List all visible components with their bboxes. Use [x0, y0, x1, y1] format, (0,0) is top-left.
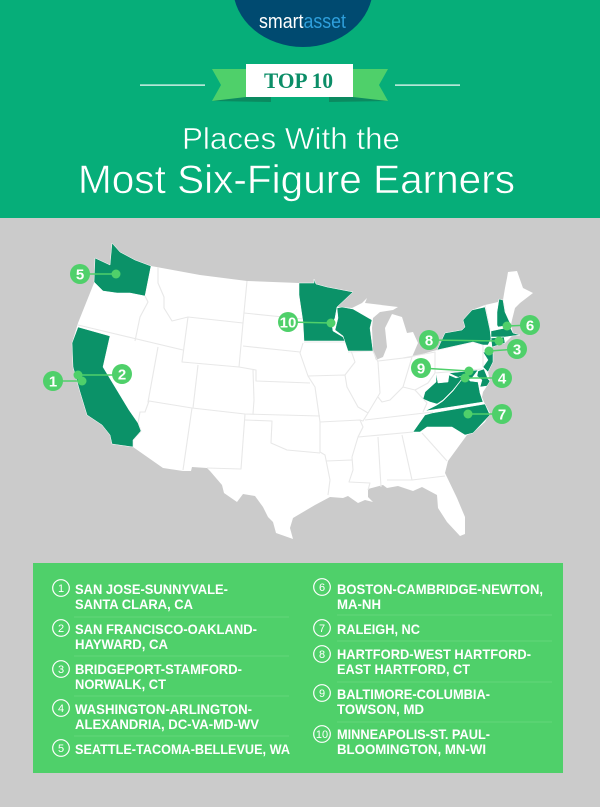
- state: West Virginia: [423, 373, 465, 404]
- marker 8: 8: [425, 332, 433, 350]
- marker 9: 9: [417, 360, 425, 378]
- item 9: BALTIMORE-COLUMBIA-: [337, 686, 490, 702]
- state borders: [78, 267, 505, 495]
- marker 7: [464, 404, 512, 424]
- marker 3: 3: [513, 342, 521, 358]
- item 7: RALEIGH, NC: [337, 621, 420, 637]
- marker 2: [74, 364, 132, 384]
- highlighted states: [72, 243, 520, 447]
- state: New York: [437, 307, 491, 350]
- state: California: [72, 327, 141, 447]
- item 10: [314, 726, 490, 757]
- state: Maryland: [449, 370, 478, 380]
- item 4: [53, 700, 260, 732]
- item 3: 3: [58, 664, 64, 676]
- map of the United States: [43, 243, 540, 539]
- state: New Jersey: [483, 352, 493, 372]
- item 2: [53, 620, 257, 652]
- item 1: SAN JOSE-SUNNYVALE-: [75, 581, 228, 597]
- item 4: 4: [58, 703, 64, 715]
- marker 10: [278, 312, 336, 332]
- marker 1: 1: [49, 374, 57, 390]
- marker 5: [70, 264, 120, 284]
- item 9: 9: [319, 688, 325, 700]
- state: Connecticut: [491, 337, 505, 347]
- marker 1: [43, 371, 86, 391]
- states silhouette: [72, 243, 533, 539]
- state: New Hampshire: [497, 299, 511, 327]
- item 8: 8: [319, 649, 325, 661]
- marker 4: 4: [498, 370, 507, 388]
- item 2: HAYWARD, CA: [75, 636, 168, 652]
- item 2: SAN FRANCISCO-OAKLAND-: [75, 621, 257, 637]
- marker 9: [411, 358, 474, 378]
- item 3: NORWALK, CT: [75, 676, 166, 692]
- item 1: SANTA CLARA, CA: [75, 596, 193, 612]
- title: Places With the: [182, 121, 400, 156]
- item 9: [314, 685, 490, 717]
- marker 5: 5: [76, 266, 84, 284]
- item 5: SEATTLE-TACOMA-BELLEVUE, WA: [75, 741, 290, 757]
- item 6: 6: [319, 582, 325, 594]
- item 3: [53, 661, 242, 692]
- item 8: HARTFORD-WEST HARTFORD-: [337, 646, 531, 662]
- item 3: BRIDGEPORT-STAMFORD-: [75, 661, 242, 677]
- marker 3: [484, 339, 527, 359]
- title: Most Six-Figure Earners: [78, 158, 515, 202]
- item 9: TOWSON, MD: [337, 701, 424, 717]
- item 10: BLOOMINGTON, MN-WI: [337, 741, 486, 757]
- item 7: [314, 620, 420, 637]
- state: Washington: [94, 243, 151, 296]
- marker 8: [419, 330, 504, 350]
- item 10: 10: [316, 729, 328, 741]
- item 4: ALEXANDRIA, DC-VA-MD-WV: [75, 716, 260, 732]
- marker 2: 2: [118, 366, 126, 384]
- ribbon: top 10: TOP 10: [264, 68, 333, 93]
- logo: smartasset: [233, 0, 373, 47]
- item 8: EAST HARTFORD, CT: [337, 661, 470, 677]
- title: [78, 121, 515, 202]
- state: Virginia: [425, 374, 483, 411]
- ribbon: top 10: [140, 64, 460, 102]
- item 2: 2: [58, 623, 64, 635]
- logo: smartasset: smartasset: [259, 11, 346, 33]
- item 7: 7: [319, 623, 325, 635]
- marker 10: 10: [280, 314, 296, 332]
- item 5: 5: [58, 743, 64, 755]
- item 4: WASHINGTON-ARLINGTON-: [75, 701, 252, 717]
- marker 7: 7: [498, 406, 506, 424]
- item 6: [314, 579, 543, 612]
- marker 6: 6: [526, 318, 534, 334]
- item 8: [314, 646, 531, 677]
- state: Massachusetts: [491, 327, 520, 337]
- item 1: 1: [58, 583, 64, 595]
- state: North Carolina: [413, 404, 490, 435]
- panel: ranked list: [33, 563, 563, 773]
- item 6: BOSTON-CAMBRIDGE-NEWTON,: [337, 581, 543, 597]
- state: Maryland eastern shore: [477, 369, 490, 387]
- state: Wisconsin: [335, 307, 373, 351]
- item 6: MA-NH: [337, 596, 381, 612]
- item 10: MINNEAPOLIS-ST. PAUL-: [337, 726, 490, 742]
- marker 6: [502, 315, 540, 335]
- state: Minnesota: [299, 279, 353, 341]
- item 1: [53, 580, 228, 612]
- marker 4: [460, 368, 512, 388]
- header banner: [0, 0, 600, 218]
